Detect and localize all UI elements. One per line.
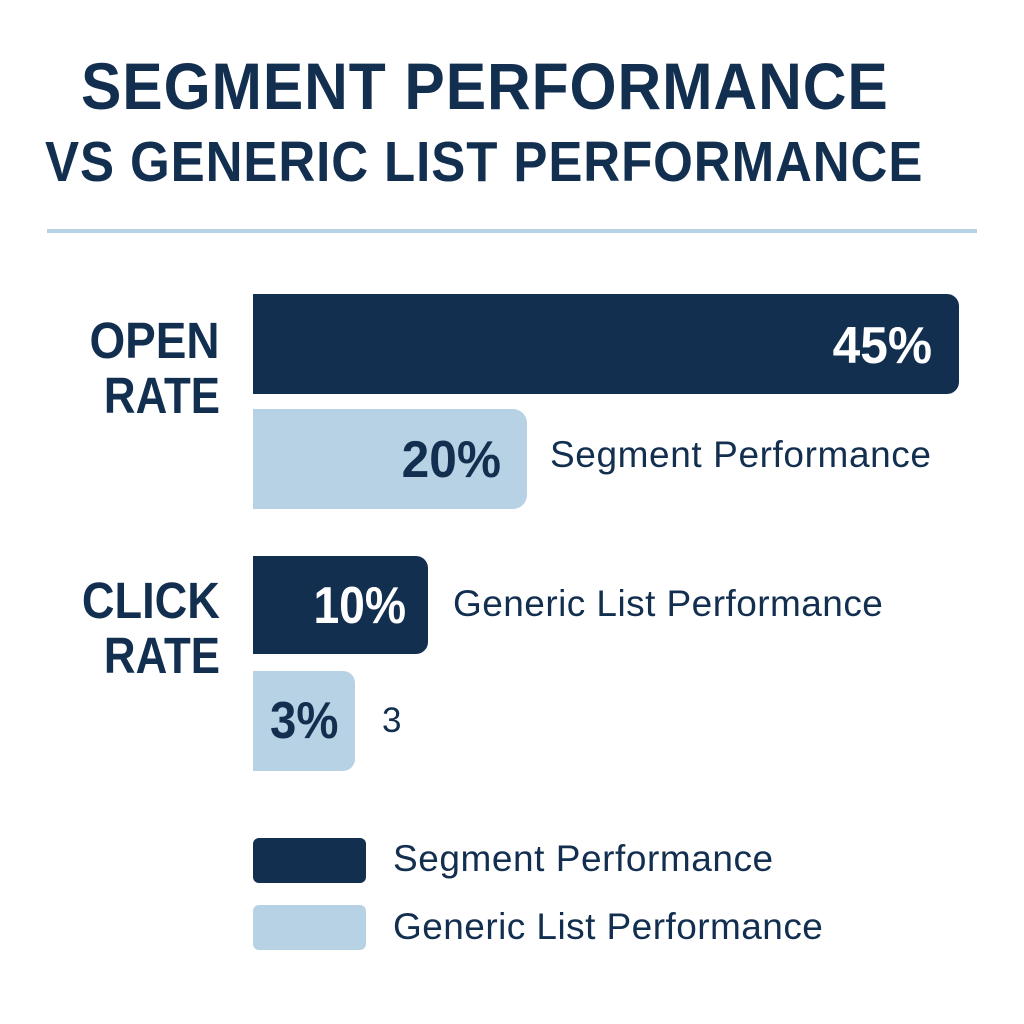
inline label: segment performance: Segment Performance — [550, 434, 932, 475]
bar: open rate generic 20%: 20% — [402, 431, 501, 489]
bar: open rate segment 45% — [253, 294, 959, 394]
bar: open rate generic 20% — [253, 409, 527, 509]
bar: open rate segment 45%: 45% — [833, 317, 932, 375]
row label: click rate: RATE — [104, 627, 220, 684]
stray value label: 3 — [382, 701, 401, 740]
row label: click rate: CLICK — [82, 572, 220, 629]
bar: click rate generic 3%: 3% — [270, 692, 338, 750]
row label: open rate — [90, 312, 220, 424]
title line 2: VS GENERIC LIST PERFORMANCE — [45, 130, 923, 194]
bar: click rate generic 3% — [253, 671, 355, 771]
legend — [253, 838, 823, 950]
legend text: generic: Generic List Performance — [393, 906, 823, 947]
legend text: segment: Segment Performance — [393, 838, 774, 879]
row label: open rate: OPEN — [90, 312, 220, 369]
bar: click rate segment 10%: 10% — [313, 577, 406, 635]
legend swatch: segment — [253, 838, 366, 883]
title — [45, 49, 923, 194]
legend swatch: generic — [253, 905, 366, 950]
bar: click rate segment 10% — [253, 556, 428, 654]
inline label: generic list performance: Generic List Performance — [453, 583, 883, 624]
row label: click rate — [82, 572, 220, 684]
row label: open rate: RATE — [104, 367, 220, 424]
title line 1: SEGMENT PERFORMANCE — [81, 49, 889, 123]
